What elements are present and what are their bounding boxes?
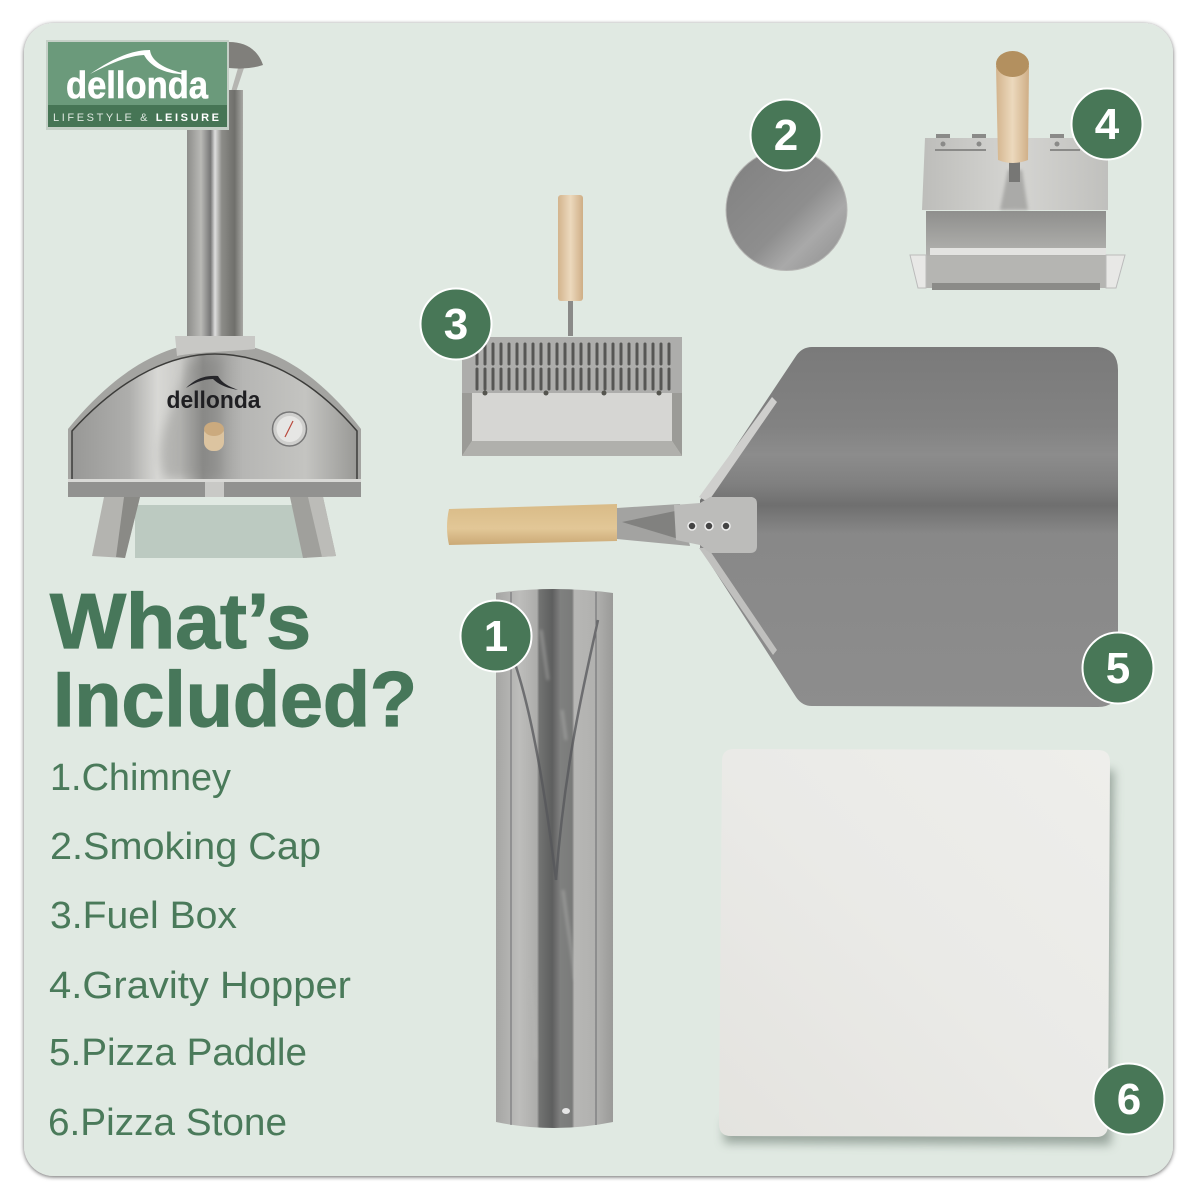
- logo wave: [90, 50, 187, 74]
- chimney hole: [562, 1108, 570, 1114]
- oven brand mark: dellonda: [166, 387, 261, 414]
- logo green upper: [48, 42, 227, 105]
- paddle lower rib: [699, 548, 777, 655]
- chimney highlights: [530, 630, 575, 1060]
- item 5: pizza paddle: [447, 347, 1118, 707]
- list item 1: 1.Chimney: [50, 757, 231, 799]
- list item 3: 3.Fuel Box: [50, 895, 237, 937]
- list item 5: 5.Pizza Paddle: [49, 1032, 307, 1074]
- paddle blade: [700, 347, 1118, 707]
- oven legs: [92, 497, 336, 558]
- logo: [46, 40, 229, 130]
- badge 4: 4: [1095, 100, 1120, 149]
- fuel box screw: [568, 300, 573, 336]
- oven collar: [175, 336, 255, 356]
- paddle handle: [447, 504, 617, 545]
- list item 6: 6.Pizza Stone: [48, 1102, 287, 1144]
- fuel box bolts: [482, 390, 662, 396]
- hopper body: [926, 211, 1106, 257]
- oven chimney: [187, 90, 243, 338]
- title: What’s: [50, 577, 311, 665]
- badge 5: [1082, 632, 1154, 704]
- oven brand mark: [166, 376, 261, 414]
- oven door: [72, 354, 357, 481]
- badge 1: [460, 600, 532, 672]
- badge 5: 5: [1106, 644, 1130, 693]
- chimney reflections: [510, 592, 598, 1125]
- logo wordmark: dellonda: [66, 65, 209, 107]
- item 4: gravity hopper: [910, 51, 1125, 290]
- hopper handle: [996, 51, 1029, 163]
- item 6: pizza stone: [719, 749, 1114, 1145]
- badge 2: [750, 100, 822, 170]
- hopper tray: [920, 256, 1116, 288]
- item 1: chimney: [496, 589, 613, 1128]
- item list: [48, 757, 351, 1144]
- hopper lid streak: [1000, 170, 1028, 210]
- list item 4: 4.Gravity Hopper: [49, 965, 351, 1007]
- hopper shaft: [1009, 160, 1020, 182]
- title: Included?: [53, 655, 417, 743]
- oven product image: [68, 42, 361, 558]
- fuel box bottom lip: [462, 441, 682, 456]
- hopper lid: [922, 138, 1108, 210]
- badge 3: 3: [444, 300, 468, 349]
- oven door reflection: [160, 358, 222, 478]
- paddle bracket: [674, 497, 757, 553]
- paddle upper rib: [699, 397, 777, 502]
- hopper hinges: [935, 134, 1080, 151]
- badge 4: [1072, 88, 1142, 160]
- logo tagline: LIFESTYLE & LEISURE: [53, 112, 222, 124]
- item 2: smoking cap: [726, 150, 847, 270]
- logo green lower: [48, 105, 227, 127]
- badge 1: 1: [484, 612, 508, 661]
- list item 2: 2.Smoking Cap: [50, 826, 321, 868]
- badge 3: [420, 288, 492, 360]
- badge 6: 6: [1117, 1075, 1141, 1124]
- badge 2: 2: [774, 111, 798, 160]
- badge 6: [1094, 1064, 1164, 1134]
- paddle neck: [617, 504, 690, 546]
- fuel box handle: [558, 195, 583, 301]
- oven knob: [204, 422, 224, 451]
- fuel box slots: [477, 344, 669, 390]
- item 3: fuel box: [462, 195, 682, 456]
- title: [50, 577, 417, 743]
- fuel box front panel: [462, 393, 682, 441]
- oven dome: [68, 342, 361, 482]
- oven cap: [229, 42, 263, 92]
- oven base: [68, 479, 361, 497]
- fuel box back plate: [462, 337, 682, 393]
- oven thermometer: [272, 412, 306, 446]
- oven floor shadow: [135, 505, 307, 558]
